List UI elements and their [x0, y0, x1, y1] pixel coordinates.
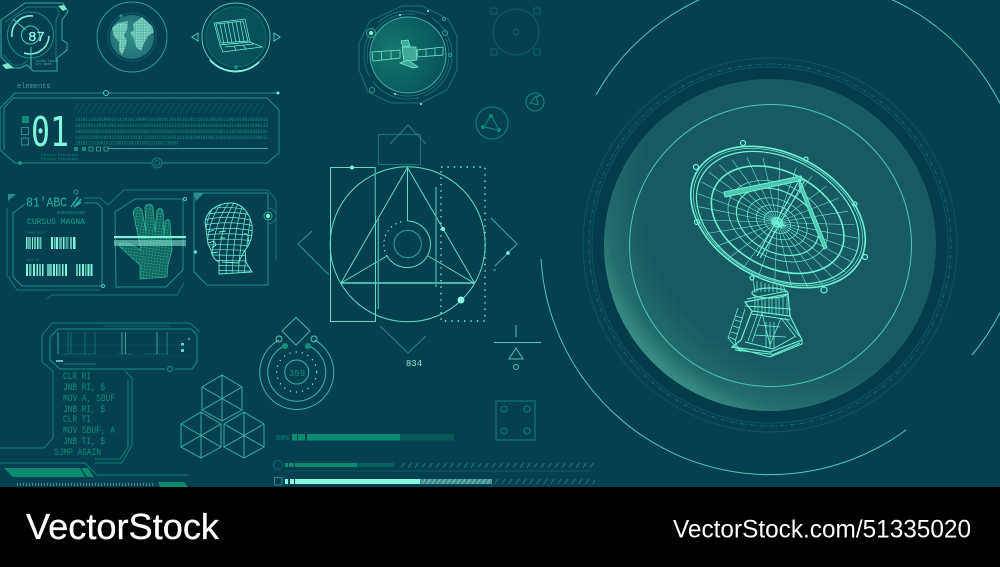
bottom chevron: [380, 326, 426, 353]
dish reflector: [666, 118, 890, 316]
right chevron: [491, 218, 517, 270]
panel: elements 01: [0, 83, 280, 168]
triangle: [341, 168, 474, 283]
bar 60%: 60%: [276, 435, 289, 443]
panel: elements 01: Finibus Ultricies: [41, 157, 78, 162]
code lines: JNB RI, $: [63, 404, 105, 416]
watermark url: VectorStock.com/51335020: [673, 516, 971, 544]
vertical bars: [375, 167, 436, 309]
diagram nodes: [350, 166, 354, 170]
dotted rectangle: [441, 167, 485, 321]
code lines: CLR RI: [63, 372, 91, 383]
laptop: [214, 19, 262, 52]
diamond: [282, 318, 310, 345]
icon: globe: [97, 2, 167, 72]
binary data block: [75, 116, 269, 146]
chart markers: [181, 343, 184, 346]
radar dish panel: [541, 0, 1000, 475]
watermark logo: VectorStock: [26, 506, 220, 547]
card heading: 81′ABC: [26, 196, 67, 212]
watermark bar: [0, 487, 1000, 567]
chart spikes: [58, 332, 168, 354]
rim bolts: [694, 140, 868, 293]
icon: small triangle badge: [526, 93, 544, 111]
code lines: SJMP AGAIN: [54, 448, 101, 459]
bright arc: [210, 60, 259, 71]
chart frame: [42, 323, 200, 371]
face frame: [194, 193, 268, 285]
gauge value: 87: [28, 30, 45, 46]
panel: hand scan: [47, 190, 276, 299]
gauge rings: [8, 12, 54, 58]
card text: SUSPENDISSE: [57, 211, 85, 216]
code lines: JNB RI, $: [63, 382, 105, 394]
dashed bezel rings: [583, 58, 957, 432]
left arrow: [192, 33, 198, 41]
bar 2: [274, 460, 282, 470]
satellite badge: [359, 6, 457, 105]
dial value: 359: [289, 369, 305, 379]
gauge widget 87: sit amet: [35, 62, 52, 67]
wireframe head: [204, 200, 254, 276]
balance symbol: [494, 325, 541, 370]
outer arc top: [596, 0, 1000, 355]
big number: 01: [31, 108, 69, 156]
panel label: elements: [17, 83, 51, 91]
binary data block: 11010110001010101010110101110101101010111101010010100101010010110101100011: [75, 134, 269, 141]
status squares: [22, 116, 29, 123]
left chevron: [298, 231, 329, 275]
bottom-left status strip: [0, 463, 188, 487]
diagram label: 834: [406, 359, 422, 369]
barcodes: [26, 237, 92, 276]
scan bars: [114, 236, 186, 238]
code lines: MOV SBUF, A: [63, 426, 115, 437]
glowing disk: [604, 79, 936, 411]
icon: wireframe radio telescope: [666, 118, 890, 357]
panel: code listing: [0, 371, 132, 463]
tiny caption: lorem ipsum: [35, 59, 58, 64]
binary data block: 10101011101010011001001010100101011101010100101010101001001011001011100113: [75, 122, 268, 129]
inner ring: [630, 104, 912, 386]
binary data block: 10101110101000101110101100001010010110101101011101010010111001010010101010: [75, 116, 268, 123]
panel: face scan: [194, 193, 276, 285]
faint target circle: [491, 8, 540, 55]
octagonal frames: [359, 6, 457, 103]
hand frame: [108, 190, 276, 260]
panel: barcode card: DOLOR: [27, 259, 40, 263]
code lines: JNB TI, $: [63, 436, 105, 448]
gauge frame: [1, 3, 68, 71]
right arrow: [274, 33, 280, 41]
wireframe hand: [119, 204, 172, 279]
dial nodes: [276, 336, 282, 342]
feed support struts: [724, 176, 827, 258]
gauge widget 87: [1, 3, 68, 71]
satellite: [372, 40, 443, 68]
code lines: CLR TI: [63, 415, 91, 426]
bar 3: [274, 478, 282, 485]
icon: triangle badge: [476, 107, 508, 139]
chart rules: [58, 333, 190, 356]
code lines: MOV A, SBUF: [63, 394, 115, 405]
tiny notes: Finibus Ultricies: [41, 153, 78, 158]
panel: barcode card: CURSUS MAGNA: [27, 218, 85, 227]
pedestal and ladder: [728, 279, 802, 357]
pager squares and rule: [74, 147, 268, 151]
card frame: [7, 198, 108, 290]
progress bars: [274, 401, 595, 485]
panel: barcode card: PRAESENT: [27, 232, 47, 236]
outer arcs: [260, 340, 334, 409]
square grid icon: [496, 401, 535, 440]
hub rings: [387, 221, 430, 268]
panel: barcode card: [7, 190, 108, 290]
frame nodes: [369, 31, 373, 35]
circle and frame: [330, 167, 485, 322]
code lines: [54, 372, 115, 459]
outer arc bottom: [541, 259, 906, 475]
faint top house: [378, 125, 426, 164]
code frame: [0, 371, 132, 463]
dial 359: [260, 318, 334, 409]
binary data block: 1010111010010101001010010100010100115000: [75, 140, 178, 146]
icon: laptop in circle: [192, 3, 280, 71]
panel: line chart: [42, 323, 200, 372]
central geometric diagram: [298, 125, 517, 369]
corner hatch tabs: [2, 5, 67, 69]
icon: hexagonal cubes: [181, 375, 264, 458]
target ring: [264, 208, 276, 224]
binary data block: 10010010010100101001010010100100101001010010100101001010011100101010000101: [75, 128, 269, 135]
continents: [112, 17, 154, 55]
panel frame: [0, 93, 279, 163]
